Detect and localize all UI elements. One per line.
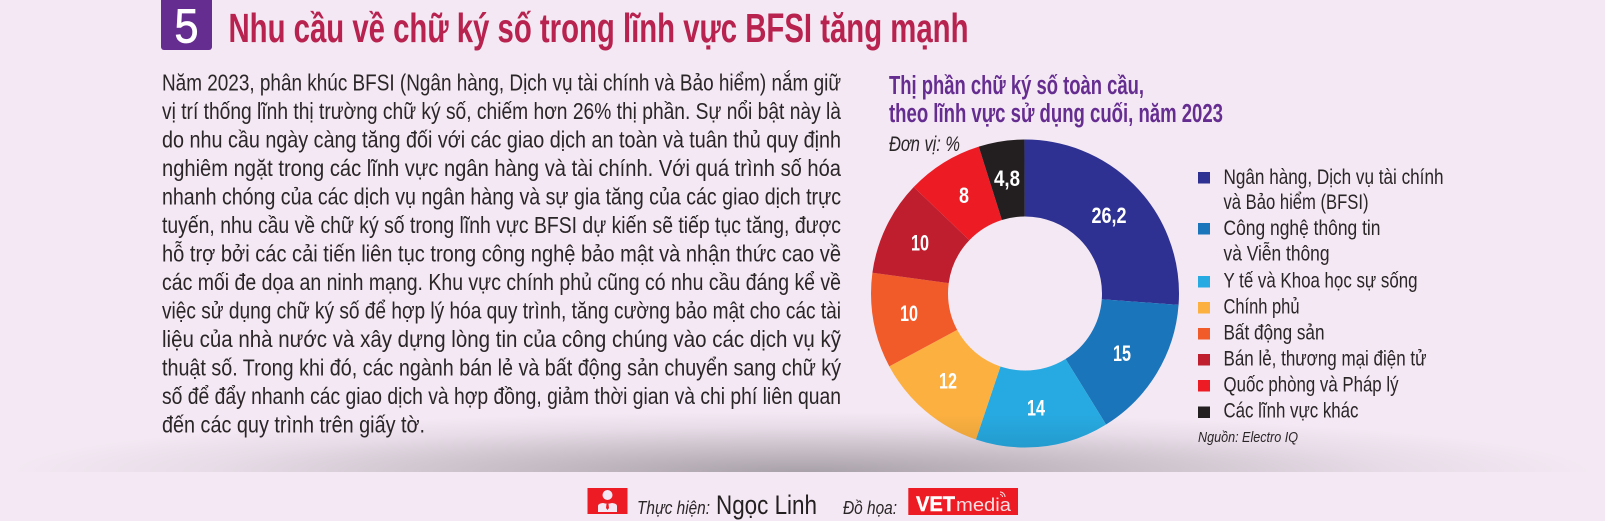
text block: body paragraph (162, 70, 842, 438)
donut chart: 15 (1113, 341, 1131, 366)
text block: body paragraph: nghiêm ngặt trong các lĩnh vực ngân hàng và tài chính. Với quá trình số hóa (162, 155, 842, 181)
text block: body paragraph: hỗ trợ bởi các cải tiến liên tục trong công nghệ bảo mật và nhận thức cao về (162, 241, 841, 267)
donut chart: 4,8 (994, 166, 1020, 191)
footer credits: Ngọc Linh (716, 490, 817, 520)
donut chart: 8 (959, 183, 969, 208)
text block: body paragraph: nhanh chóng của các dịch vụ ngân hàng và sự gia tăng của các giao dịch trực (162, 184, 841, 210)
text block: body paragraph: các mối đe dọa an ninh mạng. Khu vực chính phủ cũng có nhu cầu đáng kể về (162, 269, 841, 295)
icon: author (588, 488, 628, 514)
credit: graphics: Đồ họa: (843, 497, 897, 518)
text block: body paragraph: Năm 2023, phân khúc BFSI (Ngân hàng, Dịch vụ tài chính và Bảo hiểm) nắm giữ (162, 70, 841, 96)
icon: number badge: 5 (174, 0, 198, 54)
credit: author: Thực hiện: (637, 497, 710, 518)
text block: body paragraph: tuyến, nhu cầu về chữ ký số trong lĩnh vực BFSI dự kiến sẽ tiếp tục tăng, được (162, 212, 841, 238)
legend: Bán lẻ, thương mại điện tử (1224, 346, 1426, 370)
legend: và Viễn thông (1224, 240, 1330, 266)
footer credits (588, 488, 1018, 520)
logo: VETmedia: media (956, 494, 1012, 515)
legend (1198, 165, 1444, 422)
logo: VETmedia (908, 488, 1018, 516)
text block: body paragraph: việc sử dụng chữ ký số để hợp lý hóa quy trình, tăng cường bảo mật cho các tài (162, 298, 841, 324)
legend: Công nghệ thông tin (1224, 216, 1380, 240)
text block: body paragraph: do nhu cầu ngày càng tăng đối với các giao dịch an toàn và tuân thủ quy định (162, 127, 841, 153)
legend: Bất động sản (1224, 320, 1324, 344)
chart heading: Thị phần chữ ký số toàn cầu, (889, 72, 1144, 100)
donut chart: 12 (939, 368, 957, 394)
unit note: Đơn vị: % (889, 133, 960, 156)
text block: body paragraph: thuật số. Trong khi đó, các ngành bán lẻ và bất động sản chuyển sang chữ ký (162, 355, 841, 381)
legend: Ngân hàng, Dịch vụ tài chính (1224, 165, 1444, 189)
text block: body paragraph: đến các quy trình trên giấy tờ. (162, 412, 425, 438)
legend: và Bảo hiểm (BFSI) (1224, 190, 1368, 214)
logo: VETmedia: VET (916, 493, 955, 516)
text block: body paragraph: số để đẩy nhanh các giao dịch và hợp đồng, giảm thời gian và chi phí liên quan (162, 383, 841, 409)
donut chart: 10 (900, 301, 918, 326)
legend: Các lĩnh vực khác (1224, 398, 1359, 422)
legend: Quốc phòng và Pháp lý (1224, 372, 1399, 396)
icon: number badge (161, 0, 212, 54)
title: Nhu cầu về chữ ký số trong lĩnh vực BFSI tăng mạnh (228, 5, 968, 51)
legend: Y tế và Khoa học sự sống (1224, 268, 1418, 292)
chart heading (889, 72, 1223, 128)
donut chart: 14 (1027, 396, 1046, 420)
donut chart: 10 (911, 230, 929, 256)
donut chart (871, 166, 1179, 448)
source note: Nguồn: Electro IQ (1198, 429, 1298, 446)
text block: body paragraph: liệu của nhà nước và xây dựng lòng tin của công chúng vào các dịch vụ kỹ (162, 326, 841, 352)
heading (161, 0, 968, 54)
donut chart: 26,2 (1092, 203, 1126, 228)
text block: body paragraph: vị trí thống lĩnh thị trường chữ ký số, chiếm hơn 26% thị phần. Sự nổi bật này là (162, 98, 842, 124)
legend: Chính phủ (1224, 294, 1300, 318)
chart heading: theo lĩnh vực sử dụng cuối, năm 2023 (889, 100, 1223, 128)
